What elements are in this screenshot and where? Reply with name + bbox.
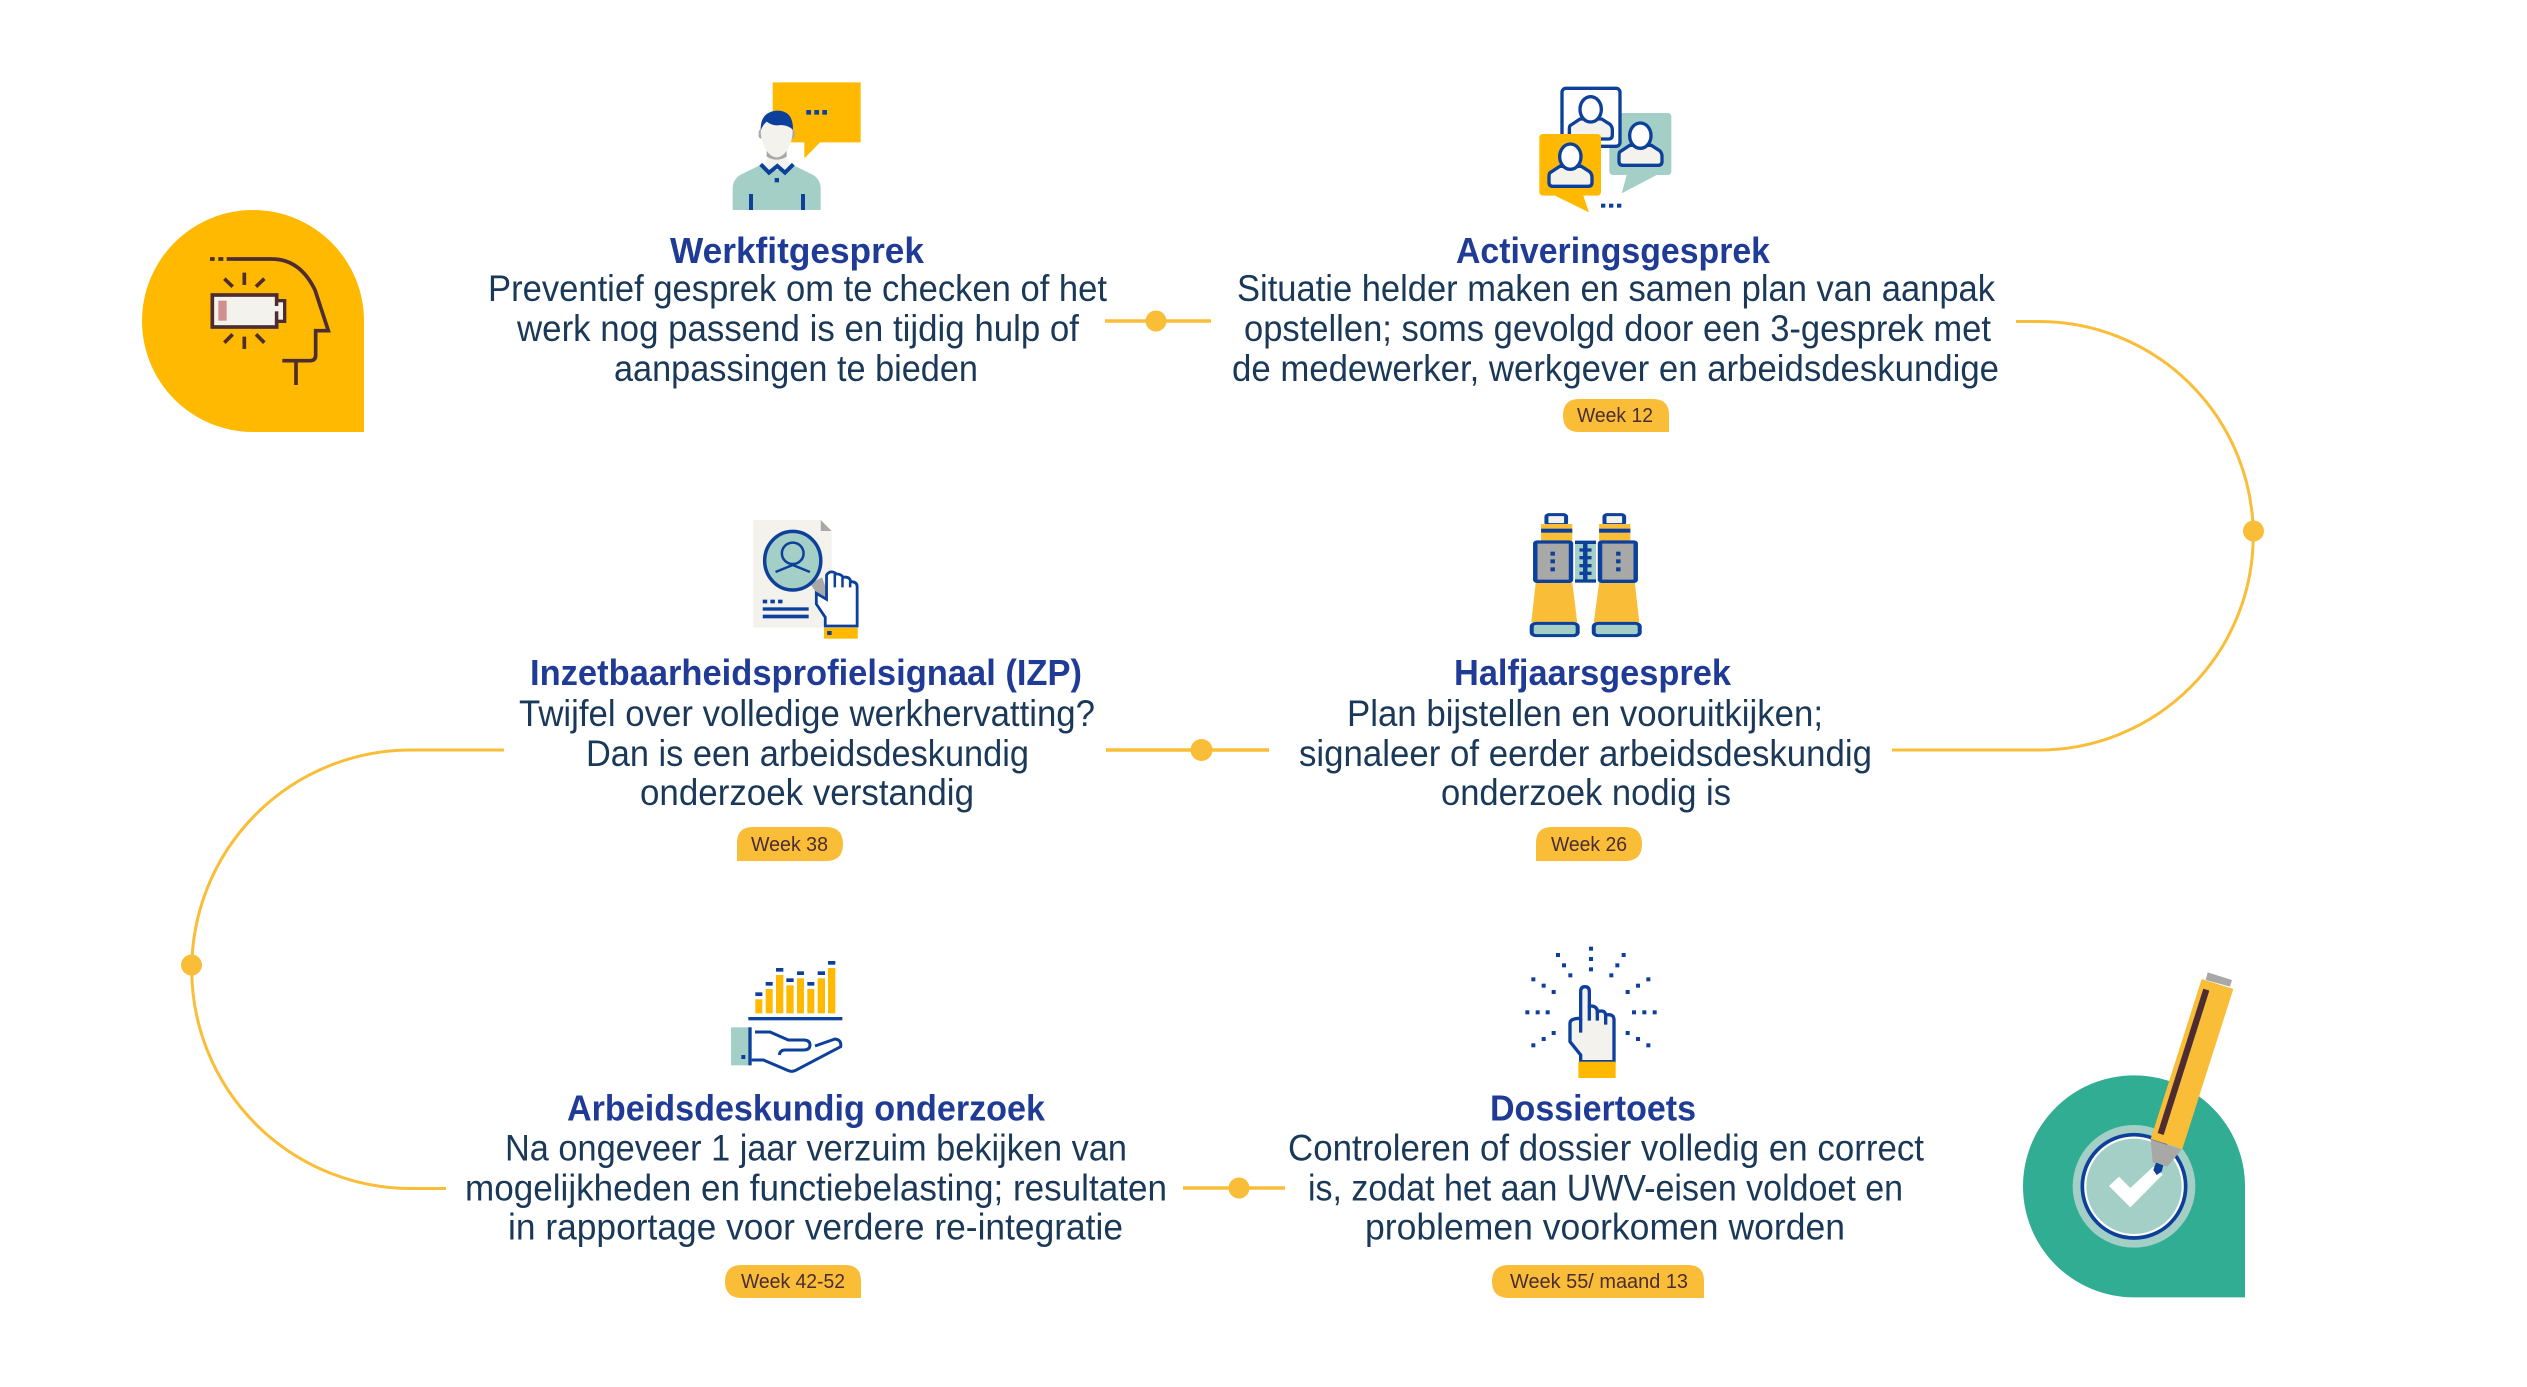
description: Twijfel over volledige werkhervatting? — [519, 693, 1095, 734]
heading: Inzetbaarheidsprofielsignaal (IZP) — [530, 652, 1082, 693]
icon: hand holding bar chart — [731, 961, 842, 1071]
badge: week 26: Week 26 — [1551, 834, 1627, 856]
description: signaleer of eerder arbeidsdeskundig — [1299, 733, 1872, 774]
description — [488, 268, 1108, 389]
badge: week 55 / maand 13 — [1492, 1265, 1704, 1298]
step: Activeringsgesprek — [1232, 88, 1999, 432]
badge: week 12: Week 12 — [1577, 405, 1653, 427]
icon: binoculars — [1531, 515, 1640, 636]
description: problemen voorkomen worden — [1365, 1206, 1845, 1248]
description: mogelijkheden en functiebelasting; resultaten — [465, 1168, 1167, 1208]
description: onderzoek verstandig — [640, 772, 974, 813]
description: opstellen; soms gevolgd door een 3-gesprek met — [1244, 308, 1992, 349]
description — [1288, 1128, 1925, 1248]
heading: Dossiertoets — [1490, 1088, 1696, 1128]
connector: bottom — [1183, 1178, 1285, 1198]
description — [465, 1128, 1167, 1248]
icon: pointing hand with sparkle dots — [1525, 947, 1657, 1078]
description: Controleren of dossier volledig en correct — [1288, 1128, 1925, 1168]
description: Na ongeveer 1 jaar verzuim bekijken van — [505, 1128, 1127, 1168]
description: is, zodat het aan UWV-eisen voldoet en — [1308, 1168, 1903, 1208]
step: Werkfitgesprek — [488, 82, 1108, 389]
connector: middle — [1106, 739, 1269, 761]
description: de medewerker, werkgever en arbeidsdeskundige — [1232, 348, 1999, 389]
icon: green marker with check and pen — [2023, 972, 2245, 1297]
icon: document with magnifier and hand — [753, 520, 858, 639]
badge: week 42-52 — [725, 1265, 861, 1298]
step: Arbeidsdeskundig onderzoek — [465, 961, 1167, 1298]
badge: week 12 — [1563, 399, 1669, 432]
description: Dan is een arbeidsdeskundig — [586, 733, 1029, 774]
badge: week 42-52: Week 42-52 — [741, 1271, 845, 1293]
icon: tired head with low battery — [142, 210, 364, 432]
badge: week 38 — [737, 827, 843, 861]
description: Situatie helder maken en samen plan van aanpak — [1237, 268, 1995, 309]
description — [1232, 268, 1999, 389]
step: Halfjaarsgesprek — [1299, 515, 1872, 861]
connector: left arc — [181, 750, 504, 1188]
badge: week 38: Week 38 — [751, 834, 828, 856]
description: in rapportage voor verdere re-integratie — [508, 1206, 1123, 1248]
description — [519, 693, 1095, 813]
heading: Werkfitgesprek — [670, 230, 925, 271]
description: werk nog passend is en tijdig hulp of — [516, 308, 1080, 349]
icon: person with speech bubble — [733, 82, 861, 210]
connector: right arc — [1892, 322, 2264, 750]
connector: top — [1105, 310, 1211, 332]
heading: Activeringsgesprek — [1456, 230, 1771, 271]
badge: week 26 — [1536, 827, 1642, 861]
step: Inzetbaarheidsprofielsignaal — [519, 520, 1095, 861]
description: aanpassingen te bieden — [614, 348, 978, 389]
step: Dossiertoets — [1288, 947, 1925, 1298]
description: Preventief gesprek om te checken of het — [488, 268, 1108, 309]
badge: week 55 / maand 13: Week 55/ maand 13 — [1510, 1271, 1688, 1293]
heading: Halfjaarsgesprek — [1454, 652, 1732, 693]
description: Plan bijstellen en vooruitkijken; — [1347, 693, 1823, 734]
description: onderzoek nodig is — [1441, 772, 1731, 813]
description — [1299, 693, 1872, 813]
icon: three people in speech bubbles — [1539, 88, 1671, 212]
heading: Arbeidsdeskundig onderzoek — [567, 1088, 1046, 1128]
